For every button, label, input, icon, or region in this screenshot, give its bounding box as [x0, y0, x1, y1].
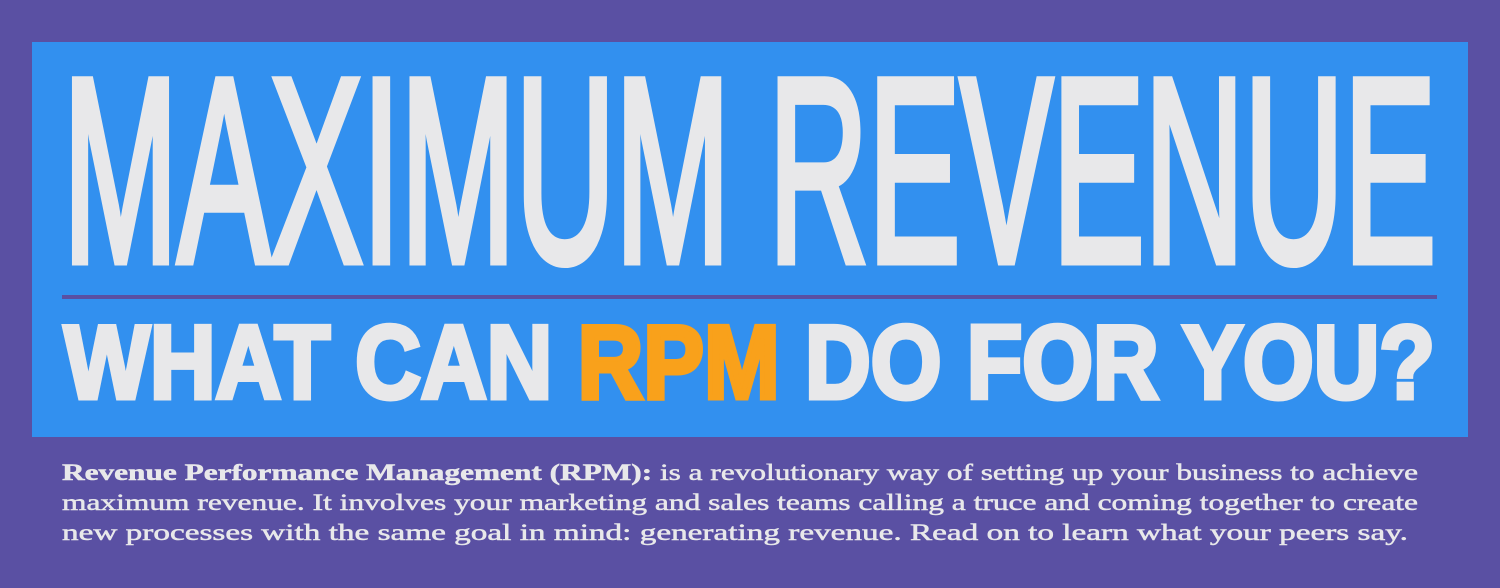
subtitle: WHAT CAN RPM DO FOR YOU? [64, 305, 1435, 421]
panel: blue title banner [32, 24, 1468, 437]
text block: RPM description: maximum revenue. It involves your marketing and sales teams calling a truce and coming together to create [62, 490, 1418, 515]
text block: RPM description: Revenue Performance Management (RPM): is a revolutionary way of setting up your business to achieve [62, 460, 1418, 485]
text block: RPM description: new processes with the same goal in mind: generating revenue. Read on to learn what your peers say. [62, 520, 1408, 545]
text block: RPM description [62, 460, 1418, 545]
